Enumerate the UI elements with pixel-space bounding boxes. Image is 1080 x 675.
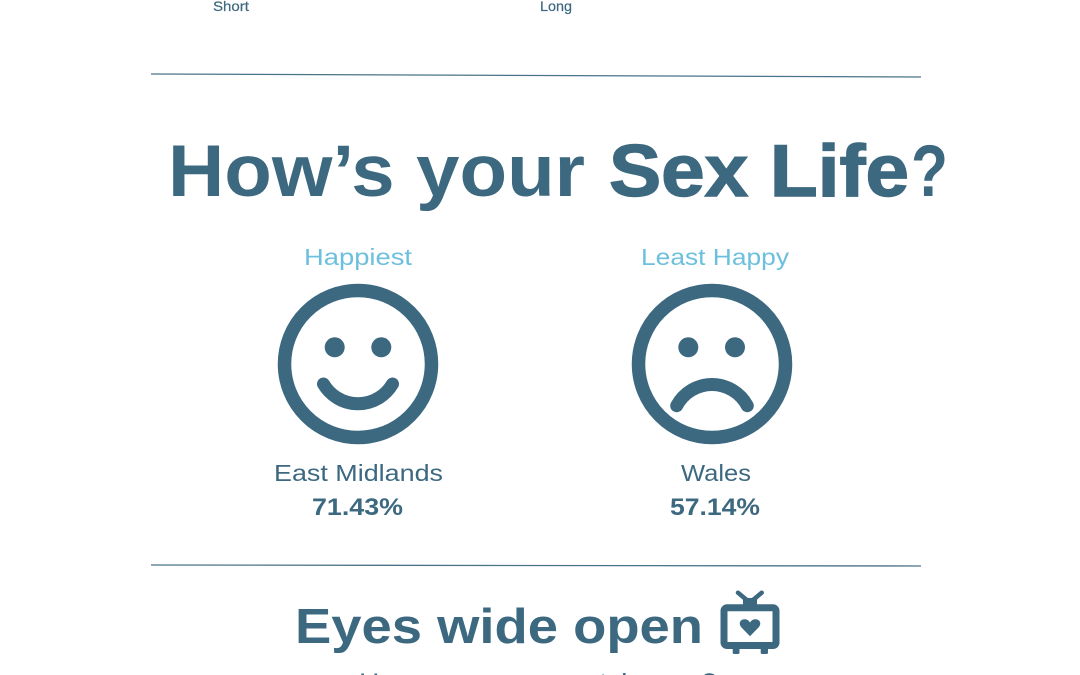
panel: happiest region [274,244,443,521]
value: 71.43%: 71.43% [312,494,403,521]
title: How's your Sex Life?: How’s your [168,131,585,212]
heading: Eyes wide open: Eyes wide open [295,600,703,654]
region name: East Midlands: East Midlands [274,460,443,486]
title: How's your Sex Life?: Sex Life [609,131,909,212]
axis labels: short and long [213,0,572,14]
icon: television with heart [724,593,776,654]
icon: smiling face [284,290,432,438]
heading: happiest: Happiest [304,244,413,270]
heading: least happy: Least Happy [641,244,790,270]
value: 57.14%: 57.14% [670,494,760,521]
panel: least happy region [638,244,790,521]
region name: Wales: Wales [681,460,751,486]
title: How's your Sex Life?: ? [911,131,948,212]
icon: sad face [638,290,786,438]
title: How's your Sex Life? [168,131,948,212]
